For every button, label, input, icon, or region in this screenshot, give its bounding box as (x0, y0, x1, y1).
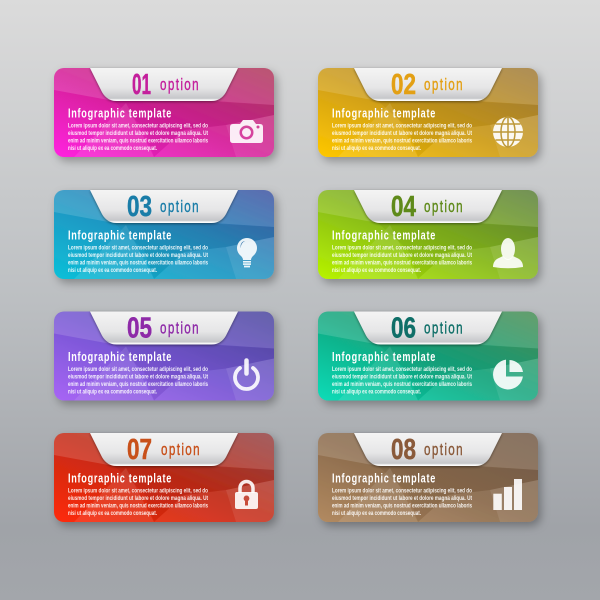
body text: nisi ut aliquip ex ea commodo consequat. (68, 268, 157, 274)
body text (68, 246, 209, 274)
body text: nisi ut aliquip ex ea commodo consequat. (332, 390, 421, 396)
number 08: 08 (391, 434, 416, 466)
body text (332, 367, 473, 396)
body text: eiusmod tempor incididunt ut labore et dolore magna aliqua. Ut (332, 253, 472, 259)
number 02: 02 (391, 69, 416, 101)
label: option: option (161, 440, 201, 459)
heading: Infographic template (332, 228, 436, 242)
body text: enim ad minim veniam, quis nostrud exercitation ullamco laboris (68, 138, 209, 144)
body text (332, 246, 473, 274)
body text: nisi ut aliquip ex ea commodo consequat. (332, 511, 421, 517)
body text: Lorem ipsum dolor sit amet, consectetur adipiscing elit, sed do (332, 246, 472, 252)
body text: eiusmod tempor incididunt ut labore et dolore magna aliqua. Ut (332, 131, 472, 137)
body text: Lorem ipsum dolor sit amet, consectetur adipiscing elit, sed do (68, 367, 208, 373)
body text: enim ad minim veniam, quis nostrud exercitation ullamco laboris (68, 382, 209, 388)
panel: option 02 (318, 68, 538, 157)
label: option: option (424, 75, 464, 94)
heading: Infographic template (68, 106, 172, 120)
tab: option 01 (90, 68, 238, 101)
body text: Lorem ipsum dolor sit amet, consectetur adipiscing elit, sed do (68, 488, 208, 494)
tab: option 05 (90, 312, 238, 344)
tab: option 06 (354, 312, 502, 344)
body text: Lorem ipsum dolor sit amet, consectetur adipiscing elit, sed do (332, 488, 472, 494)
label: option: option (160, 197, 200, 216)
body text: eiusmod tempor incididunt ut labore et dolore magna aliqua. Ut (332, 374, 472, 380)
heading: Infographic template (68, 350, 172, 364)
heading: Infographic template (68, 472, 172, 486)
body text: nisi ut aliquip ex ea commodo consequat. (332, 146, 421, 152)
tab: option 07 (90, 433, 238, 466)
number 05: 05 (127, 312, 152, 344)
body text: nisi ut aliquip ex ea commodo consequat. (68, 511, 157, 517)
body text: enim ad minim veniam, quis nostrud exercitation ullamco laboris (332, 260, 473, 266)
panel: option 03 (54, 190, 274, 279)
label: option: option (424, 197, 464, 216)
label: option: option (160, 318, 200, 338)
body text (68, 124, 209, 152)
icon: power (235, 360, 258, 389)
number 04: 04 (391, 191, 416, 223)
body text (332, 124, 473, 152)
icon: person (493, 238, 523, 268)
panel: option 01 (54, 68, 274, 157)
body text: enim ad minim veniam, quis nostrud exercitation ullamco laboris (332, 504, 473, 510)
body text: Lorem ipsum dolor sit amet, consectetur adipiscing elit, sed do (68, 246, 208, 252)
tab: option 08 (354, 433, 502, 466)
number 06: 06 (391, 312, 416, 344)
number 01: 01 (132, 69, 151, 101)
heading: Infographic template (332, 472, 436, 486)
body text: nisi ut aliquip ex ea commodo consequat. (68, 390, 157, 396)
heading: Infographic template (332, 350, 436, 364)
tab: option 03 (90, 190, 238, 223)
label: option: option (160, 75, 200, 94)
icon: padlock (235, 482, 258, 509)
body text: nisi ut aliquip ex ea commodo consequat. (68, 146, 157, 152)
body text: Lorem ipsum dolor sit amet, consectetur adipiscing elit, sed do (332, 124, 472, 130)
heading: Infographic template (332, 106, 436, 120)
panel: option 04 (318, 190, 538, 279)
body text (68, 367, 209, 396)
icon: camera (230, 120, 263, 143)
body text: enim ad minim veniam, quis nostrud exercitation ullamco laboris (68, 260, 209, 266)
panel: option 08 (318, 433, 538, 522)
panel: option 06 (318, 312, 538, 400)
body text: eiusmod tempor incididunt ut labore et dolore magna aliqua. Ut (68, 496, 208, 502)
body text: enim ad minim veniam, quis nostrud exercitation ullamco laboris (332, 138, 473, 144)
panel: option 05 (54, 312, 274, 400)
body text: eiusmod tempor incididunt ut labore et dolore magna aliqua. Ut (68, 253, 208, 259)
tab: option 02 (354, 68, 502, 101)
heading: Infographic template (68, 228, 172, 242)
body text: Lorem ipsum dolor sit amet, consectetur adipiscing elit, sed do (332, 367, 472, 373)
panel: option 07 (54, 433, 274, 522)
body text (332, 488, 473, 517)
body text: nisi ut aliquip ex ea commodo consequat. (332, 268, 421, 274)
body text: Lorem ipsum dolor sit amet, consectetur adipiscing elit, sed do (68, 124, 208, 130)
body text: enim ad minim veniam, quis nostrud exercitation ullamco laboris (332, 382, 473, 388)
label: option: option (424, 440, 464, 459)
body text: eiusmod tempor incididunt ut labore et dolore magna aliqua. Ut (68, 131, 208, 137)
icon: bar chart (493, 479, 522, 510)
body text (68, 488, 209, 517)
tab: option 04 (354, 190, 502, 223)
number 03: 03 (127, 191, 152, 223)
icon: globe (493, 117, 523, 147)
body text: enim ad minim veniam, quis nostrud exercitation ullamco laboris (68, 504, 209, 510)
label: option: option (424, 318, 464, 338)
body text: eiusmod tempor incididunt ut labore et dolore magna aliqua. Ut (332, 496, 472, 502)
number 07: 07 (127, 434, 152, 466)
icon: pie chart (493, 360, 523, 389)
icon: light bulb (237, 238, 257, 267)
body text: eiusmod tempor incididunt ut labore et dolore magna aliqua. Ut (68, 374, 208, 380)
